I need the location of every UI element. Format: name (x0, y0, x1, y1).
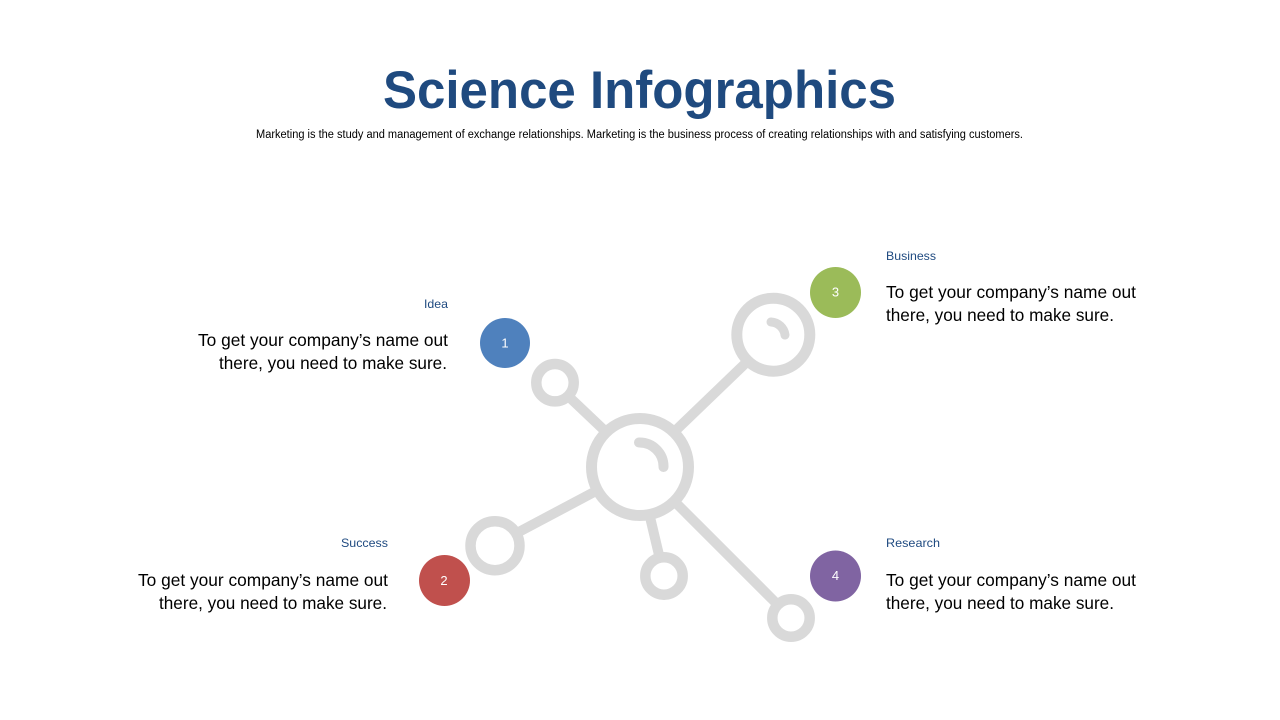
description Success: To get your company’s name out (138, 570, 388, 590)
description Research: there, you need to make sure. (886, 593, 1114, 613)
description Idea: To get your company’s name out (198, 330, 448, 350)
subtitle: Marketing is the study and management of exchange relationships. Marketing is the business process of creating relationships with and satisfying customers. (256, 129, 1023, 141)
label Success: Success (341, 536, 388, 550)
badge 2 (419, 555, 470, 606)
label Research: Research (886, 536, 940, 550)
description Idea (198, 330, 448, 373)
badge 1: 1 (501, 336, 509, 350)
title: Science Infographics (383, 61, 896, 120)
description Success: there, you need to make sure. (159, 593, 387, 613)
left node (470, 521, 520, 570)
connector lines (515, 358, 777, 604)
description Business: there, you need to make sure. (886, 305, 1114, 325)
description Business: To get your company’s name out (886, 282, 1136, 302)
description Research (886, 570, 1136, 613)
badge 2: 2 (440, 573, 448, 588)
upper right node highlight (771, 322, 785, 335)
bottom node (645, 557, 683, 595)
lower right node (772, 599, 810, 637)
badge 1 (480, 318, 530, 368)
description Success (138, 570, 388, 613)
upper right node (737, 298, 810, 371)
badge 3 (810, 267, 861, 318)
item 4: Research (810, 536, 1136, 613)
label Idea: Idea (424, 297, 448, 311)
molecule network icon (470, 298, 810, 637)
upper left node (536, 364, 574, 401)
central node (592, 418, 688, 516)
description Idea: there, you need to make sure. (219, 353, 447, 373)
badge 4: 4 (832, 568, 839, 583)
item 2: Success (138, 536, 470, 613)
central node highlight (639, 442, 664, 467)
description Research: To get your company’s name out (886, 570, 1136, 590)
badge 4 (810, 550, 861, 602)
badge 3: 3 (832, 284, 839, 300)
label Business: Business (886, 249, 936, 263)
description Business (886, 282, 1136, 325)
item 3: Business (810, 249, 1136, 325)
item 1: Idea (198, 297, 530, 373)
